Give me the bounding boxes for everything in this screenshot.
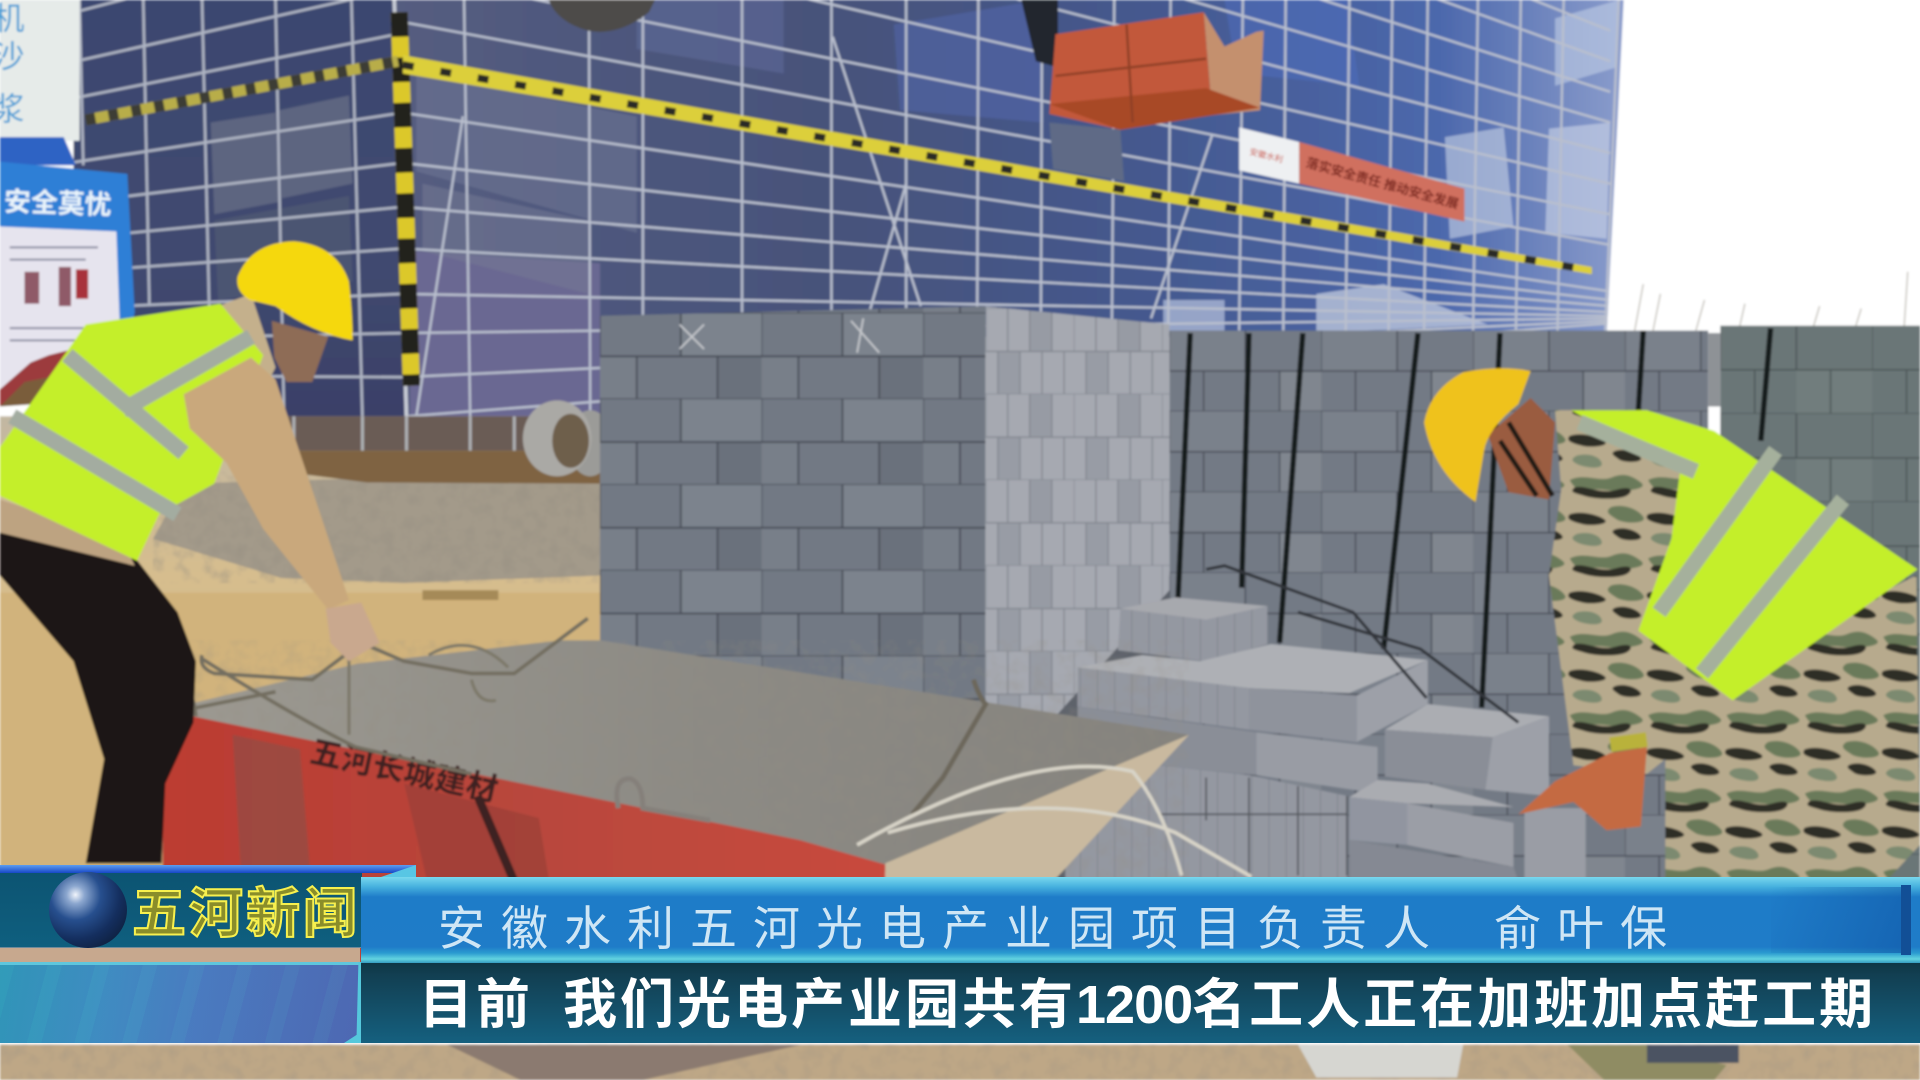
logo bar cyan tip (381, 865, 416, 877)
main brick stack: left face (600, 306, 986, 704)
site banner: 落实安全责任 推动安全发展 (1305, 155, 1461, 212)
banding straps (1178, 328, 1771, 708)
hand (326, 602, 380, 661)
building: left face (72, 0, 406, 418)
arm camouflage (1549, 410, 1714, 774)
orange hoist container (1049, 12, 1264, 130)
hi-vis vest (1571, 410, 1918, 700)
vertical hazard tape (399, 12, 411, 386)
distant trees on horizon (1635, 272, 1908, 331)
yellow helmet (1424, 368, 1531, 502)
sleeve (184, 358, 349, 610)
low stacks of bricks (1065, 566, 1586, 882)
safety poster: 安全莫忧 (3, 187, 112, 220)
right hazard tape (403, 55, 1592, 274)
title bar: speaker caption (361, 877, 1920, 964)
chalk marks (680, 318, 879, 353)
skip bucket (163, 640, 1189, 1080)
subtitle text: lead words: 目前 (419, 975, 533, 1035)
face (1488, 398, 1555, 500)
ground (0, 416, 1920, 1080)
icon: globe (49, 872, 127, 948)
speaker title text: 安徽水利五河光电产业园项目负责人 (438, 890, 1446, 959)
corner post of scaffold (394, 0, 407, 419)
subtitle text: sentence: 我们光电产业园共有1200名工人正在加班加点赶工期 (563, 975, 1876, 1035)
yellow helmet (237, 241, 353, 340)
site banner: 安徽水利 (1248, 146, 1284, 165)
face (272, 321, 328, 382)
vest reflective stripes (1580, 422, 1843, 673)
site banner (1239, 127, 1464, 222)
subtitle bar (361, 963, 1920, 1043)
dark backing behind the stacks (1053, 576, 1739, 894)
lower left blue panel (0, 962, 362, 1043)
gap strip between left bars (0, 948, 360, 962)
safety poster (0, 137, 135, 407)
wooden side plank (885, 735, 1189, 882)
ground details below banner (1298, 1044, 1739, 1080)
right worker (1424, 368, 1920, 882)
hi-vis vest (0, 304, 263, 561)
lower third: news logo bar (0, 865, 416, 948)
beige jacket lower (0, 500, 135, 566)
lower torso camouflage (1665, 576, 1920, 882)
bucket base below banner (447, 1044, 802, 1080)
title bar right end bands (1771, 887, 1905, 953)
speaker name text: 俞叶保 (1494, 890, 1683, 959)
back brick wall (1169, 326, 1920, 882)
lower left panel cyan corner (344, 962, 362, 1043)
vest reflective stripes (12, 337, 251, 514)
dark opening behind hoist (1021, 0, 1058, 67)
main brick stack: right face (986, 306, 1169, 716)
neck (218, 294, 276, 392)
logo text: 五河新闻 (132, 869, 360, 948)
skip bucket: 五河长城建材 (307, 733, 501, 808)
glove (1518, 747, 1647, 830)
logo bar body (0, 873, 362, 948)
building: right face (367, 0, 1624, 419)
wrecking bucket at top (549, 0, 655, 32)
left hazard tape (86, 61, 398, 120)
logo bar blue top strip (0, 865, 416, 873)
trousers (0, 527, 196, 863)
concrete pipes (523, 400, 612, 476)
left worker (0, 241, 380, 863)
white tank with blue characters (0, 0, 80, 141)
ropes and chains (165, 618, 1251, 877)
